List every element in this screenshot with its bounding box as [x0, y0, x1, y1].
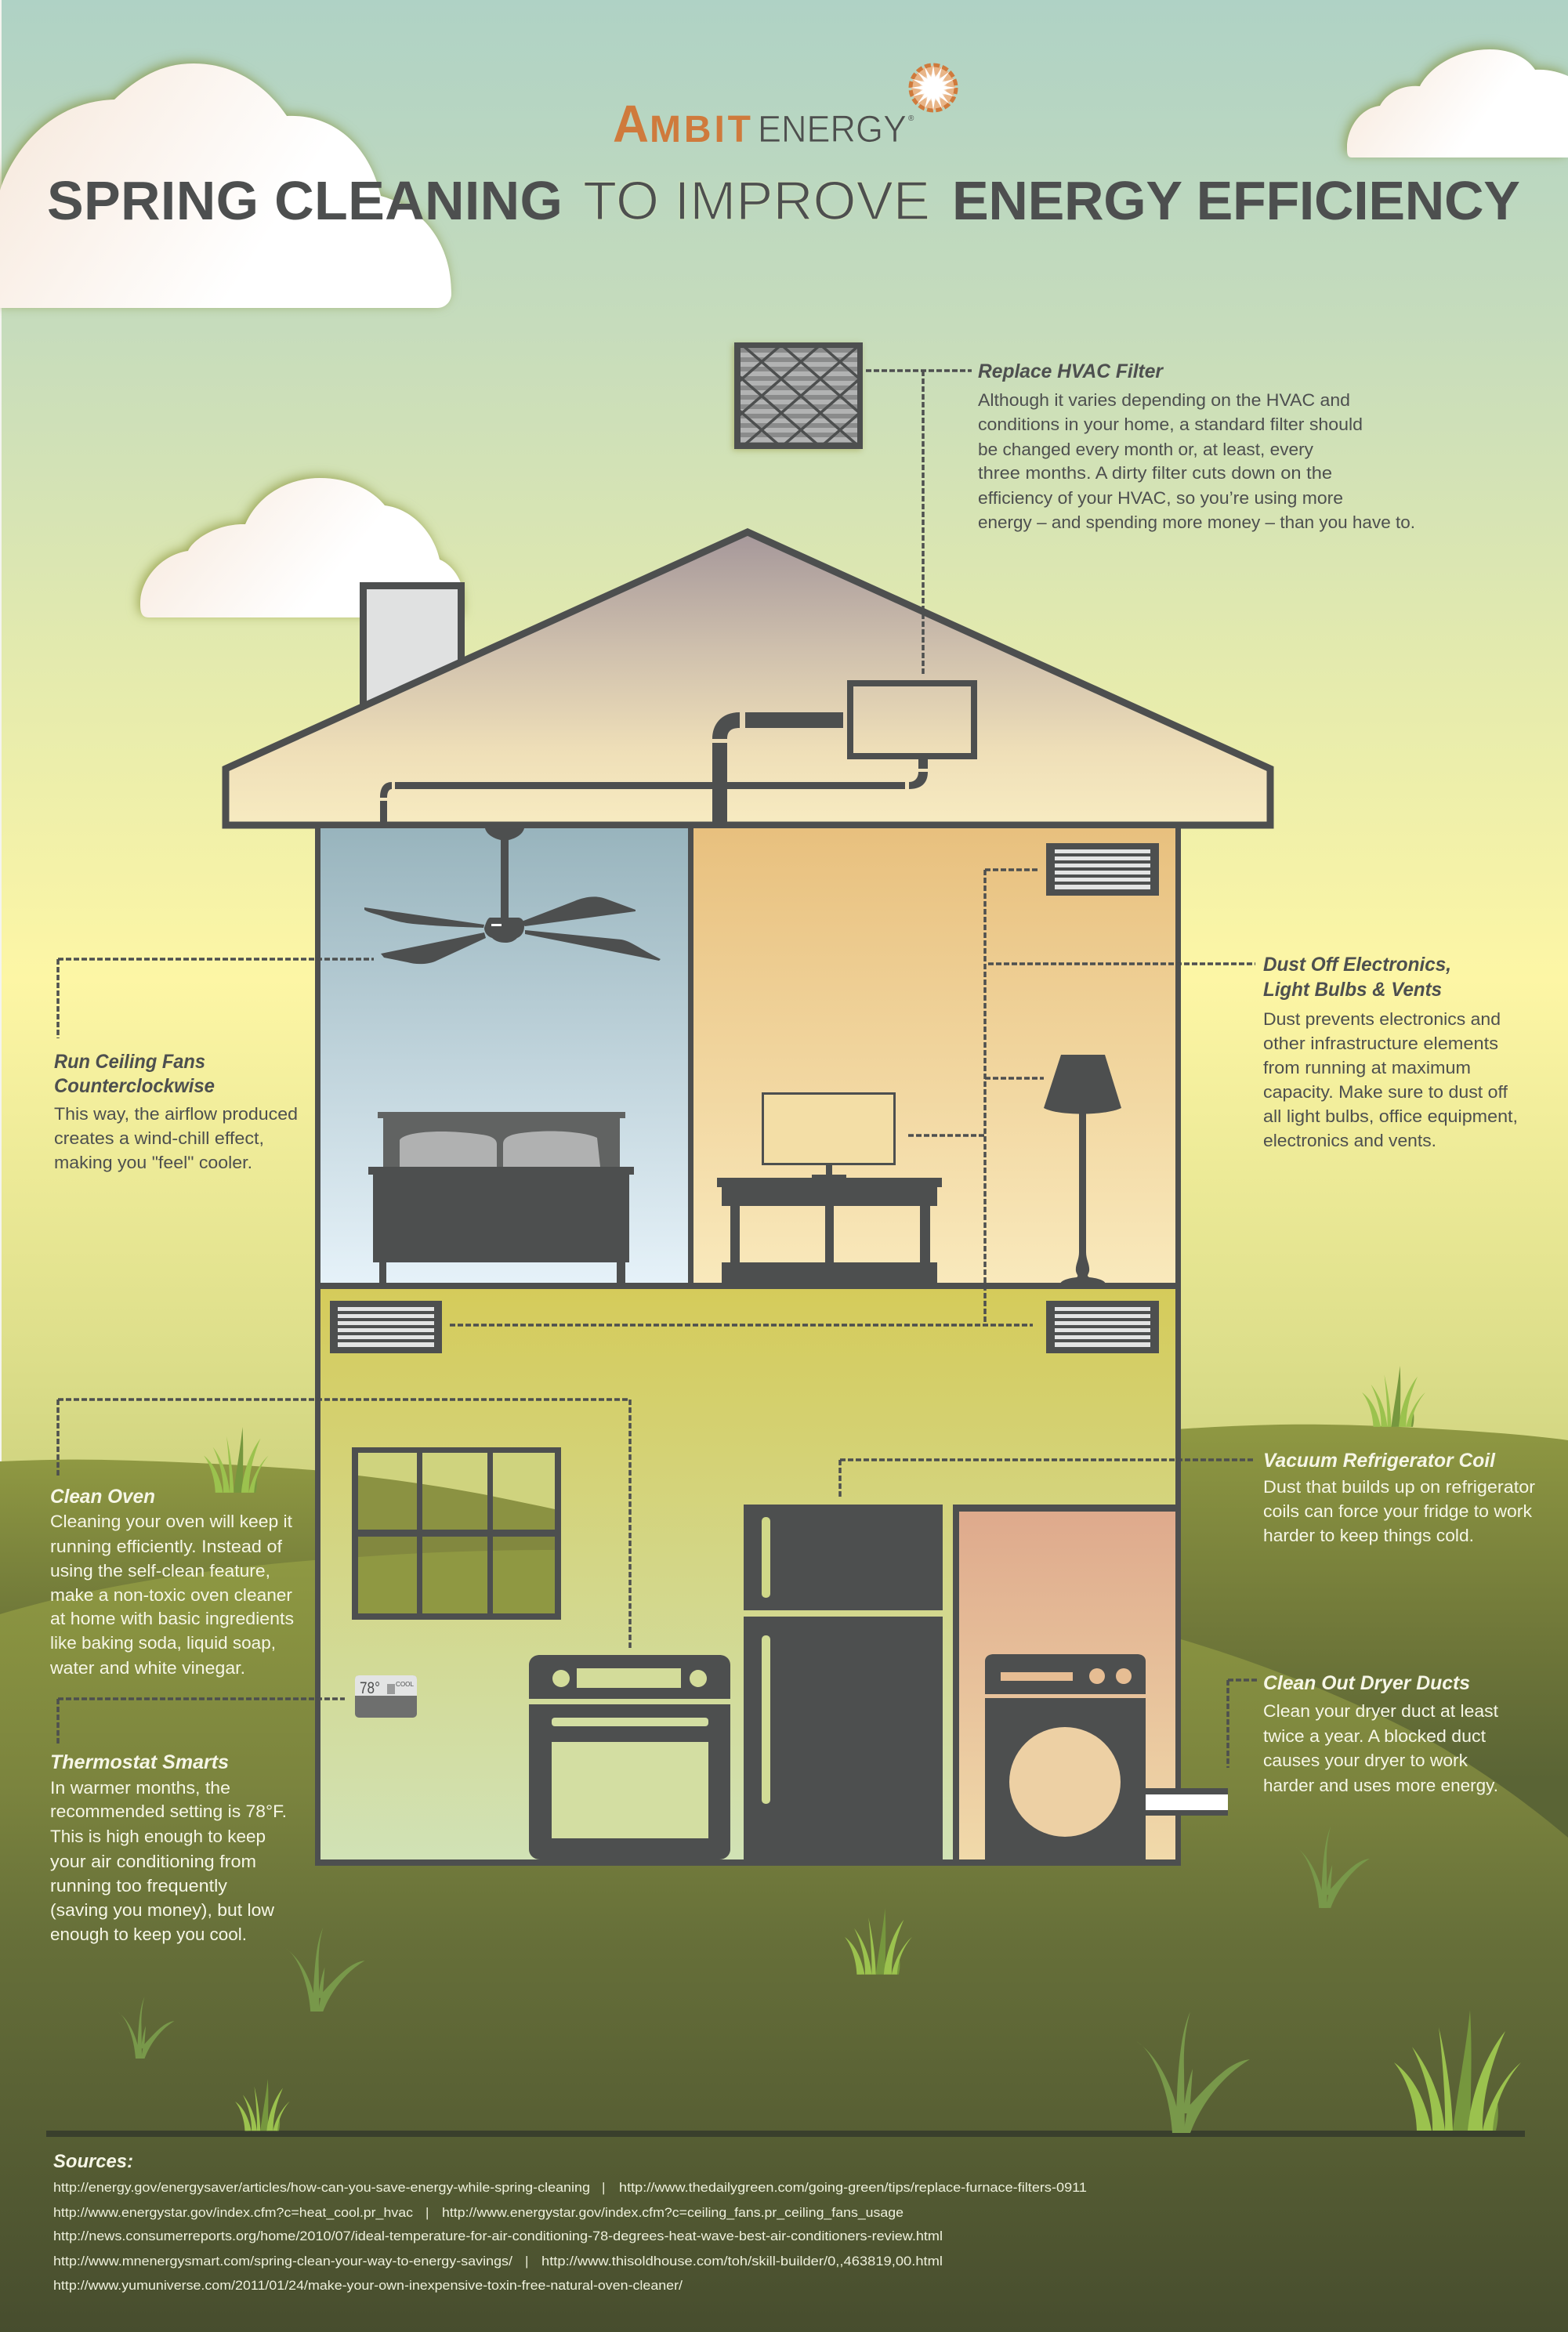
text: Replace HVAC Filter: conditions in your home, a standard filter should [978, 415, 1363, 434]
text: Run Ceiling Fans: Run Ceiling Fans [54, 1051, 205, 1073]
sources: http://www.mnenergysmart.com/spring-clean-your-way-to-energy-savings/ [53, 2254, 512, 2269]
thermostat: COOL [396, 1681, 415, 1688]
text: Dust Off Electronics [1263, 954, 1518, 1150]
roof [226, 532, 1270, 825]
chimney [364, 586, 461, 751]
text: Replace HVAC Filter: three months. A dirty filter cuts down on the [978, 463, 1332, 483]
sources: | [602, 2180, 605, 2195]
icon: HVAC duct work [380, 712, 928, 822]
text: Clean Oven: using the self-clean feature, [50, 1561, 270, 1581]
text: Thermostat Smarts: recommended setting is 78°F. [50, 1802, 287, 1821]
text: Dust Off Electronics: from running at maximum [1263, 1058, 1471, 1077]
text: Dust Off Electronics: other infrastructure elements [1263, 1034, 1498, 1053]
logo [613, 65, 956, 154]
grass: upper left [204, 1427, 269, 1493]
text: Replace HVAC Filter: Although it varies depending on the HVAC and [978, 390, 1350, 410]
sources: http://news.consumerreports.org/home/2010/07/ideal-temperature-for-air-conditioning-78-degrees-heat-wave-best-air-conditioners-review.html [53, 2229, 943, 2243]
bed [368, 1112, 634, 1284]
text: Run Ceiling Fans: making you "feel" cooler. [54, 1153, 252, 1172]
leader lines: thermostat [58, 1699, 345, 1744]
oven [529, 1655, 730, 1859]
leader lines: oven [58, 1400, 630, 1648]
text: Run Ceiling Fans: Counterclockwise [54, 1075, 215, 1097]
grass: lower left [235, 2079, 290, 2131]
title: SPRING CLEANING [47, 170, 563, 231]
text: Clean Out Dryer Ducts: causes your dryer to work [1263, 1751, 1468, 1770]
grass: far left [118, 1997, 174, 2059]
logo wordmark: A [613, 95, 649, 154]
cloud: top right [1347, 49, 1568, 158]
room: laundry [956, 1508, 1178, 1863]
sources: http://www.thedailygreen.com/going-green/tips/replace-furnace-filters-0911 [619, 2180, 1087, 2195]
grass: lower right large [1394, 2010, 1521, 2131]
logo: ® [908, 114, 914, 123]
leader lines: refrigerator [840, 1460, 1255, 1499]
text: Thermostat Smarts: running too frequently [50, 1876, 227, 1896]
text: Replace HVAC Filter: efficiency of your HVAC, so you’re using more [978, 488, 1343, 508]
logo sun [911, 65, 956, 110]
text: Clean Oven: make a non-toxic oven cleaner [50, 1585, 292, 1605]
text: Clean Out Dryer Ducts: Clean your dryer duct at least [1263, 1701, 1498, 1721]
hill: back right [1019, 1425, 1568, 1959]
sources: | [525, 2254, 528, 2269]
grass: center [845, 1908, 912, 1975]
text: Replace HVAC Filter: Replace HVAC Filter [978, 360, 1164, 382]
text: Thermostat Smarts: This is high enough to keep [50, 1827, 266, 1846]
text: Clean Oven: Cleaning your oven will keep it [50, 1512, 292, 1531]
sources: http://energy.gov/energysaver/articles/how-can-you-save-energy-while-spring-cleaning [53, 2180, 590, 2195]
ground line [46, 2131, 1525, 2137]
dryer [985, 1654, 1228, 1861]
floor lamp [1044, 1055, 1121, 1284]
text: Vacuum Refrigerator Coil: Dust that builds up on refrigerator [1263, 1477, 1535, 1497]
icon: lower right vent [1046, 1301, 1159, 1353]
window [352, 1447, 561, 1620]
grass: upper right [1362, 1366, 1425, 1427]
text: Dust Off Electronics: capacity. Make sure to dust off [1263, 1082, 1508, 1102]
sources: http://www.yumuniverse.com/2011/01/24/make-your-own-inexpensive-toxin-free-natural-oven-cleaner/ [53, 2278, 683, 2293]
text: Clean Oven [49, 1486, 294, 1678]
leader lines: ceiling fan [58, 959, 374, 1038]
thermostat [355, 1675, 417, 1718]
room: kitchen [317, 1286, 1178, 1863]
text: Vacuum Refrigerator Coil: coils can force your fridge to work [1263, 1501, 1533, 1521]
sources: http://www.energystar.gov/index.cfm?c=ceiling_fans.pr_ceiling_fans_usage [442, 2205, 904, 2220]
text: Clean Oven: running efficiently. Instead of [50, 1537, 283, 1556]
refrigerator [744, 1505, 943, 1861]
text: Run Ceiling Fans: creates a wind-chill effect, [54, 1128, 264, 1148]
text: Clean Out Dryer Ducts [1263, 1672, 1498, 1795]
grass: left [285, 1928, 365, 2012]
title: TO IMPROVE [583, 170, 930, 231]
text: Vacuum Refrigerator Coil [1263, 1450, 1535, 1545]
leader lines: electronics and vents [450, 870, 1255, 1325]
sources: http://www.thisoldhouse.com/toh/skill-builder/0,,463819,00.html [541, 2254, 943, 2269]
grass: lower right single [1136, 2012, 1250, 2133]
TV and stand [717, 1094, 942, 1284]
text: Run Ceiling Fans: This way, the airflow produced [54, 1104, 298, 1124]
icon: HVAC filter [734, 342, 863, 449]
leader lines: dryer [1228, 1680, 1258, 1768]
icon: upper vent [1046, 843, 1159, 896]
text: Replace HVAC Filter [978, 360, 1415, 532]
sources: Sources: [53, 2151, 133, 2172]
ceiling fan [364, 828, 661, 964]
leader lines: filter [866, 371, 972, 674]
text: Clean Out Dryer Ducts: harder and uses more energy. [1263, 1776, 1498, 1795]
text: Clean Out Dryer Ducts: twice a year. A blocked duct [1263, 1726, 1486, 1746]
text: Replace HVAC Filter: energy – and spending more money – than you have to. [978, 512, 1415, 532]
grass: right mid [1295, 1827, 1370, 1908]
house walls and floors [315, 825, 1181, 1866]
text: Dust Off Electronics: Dust prevents electronics and [1263, 1009, 1501, 1029]
hill: foreground [0, 1550, 1568, 2332]
text: Thermostat Smarts: Thermostat Smarts [50, 1751, 229, 1773]
title: ENERGY EFFICIENCY [952, 170, 1520, 231]
sources [53, 2151, 1087, 2293]
text: Clean Out Dryer Ducts: Clean Out Dryer Ducts [1263, 1672, 1470, 1694]
sources: http://www.energystar.gov/index.cfm?c=heat_cool.pr_hvac [53, 2205, 414, 2220]
text: Clean Oven: at home with basic ingredients [50, 1609, 294, 1628]
text: Thermostat Smarts: enough to keep you cool. [50, 1925, 247, 1944]
text: Clean Oven: water and white vinegar. [49, 1658, 245, 1678]
text: Clean Oven: Clean Oven [50, 1486, 155, 1508]
room: bedroom [317, 828, 690, 1286]
text: Thermostat Smarts [50, 1751, 287, 1944]
text: Vacuum Refrigerator Coil: Vacuum Refrigerator Coil [1263, 1450, 1496, 1472]
dryer duct [1146, 1788, 1228, 1816]
text: Run Ceiling Fans [54, 1051, 298, 1172]
text: Thermostat Smarts: In warmer months, the [50, 1778, 230, 1798]
text: Replace HVAC Filter: be changed every month or, at least, every [978, 440, 1313, 459]
cloud: behind chimney [140, 478, 465, 617]
text: Dust Off Electronics: Light Bulbs & Vents [1263, 979, 1442, 1001]
text: Vacuum Refrigerator Coil: harder to keep things cold. [1263, 1526, 1474, 1545]
HVAC unit [850, 683, 974, 756]
cloud: top left [0, 63, 451, 308]
room: living room [690, 828, 1178, 1286]
text: Dust Off Electronics: Dust Off Electronics, [1263, 954, 1451, 976]
logo: ENERGY [758, 109, 907, 150]
thermostat: 78° [360, 1679, 380, 1697]
title [47, 170, 1520, 231]
icon: lower left vent [330, 1301, 442, 1353]
logo: MBIT [650, 109, 751, 150]
sources: | [425, 2205, 429, 2220]
text: Clean Oven: like baking soda, liquid soap, [50, 1633, 276, 1653]
text: Dust Off Electronics: all light bulbs, office equipment, [1263, 1106, 1518, 1126]
hill: back left [0, 1460, 901, 1724]
text: Thermostat Smarts: your air conditioning from [50, 1852, 256, 1871]
text: Dust Off Electronics: electronics and vents. [1263, 1131, 1436, 1150]
text: Thermostat Smarts: (saving you money), but low [50, 1900, 274, 1920]
